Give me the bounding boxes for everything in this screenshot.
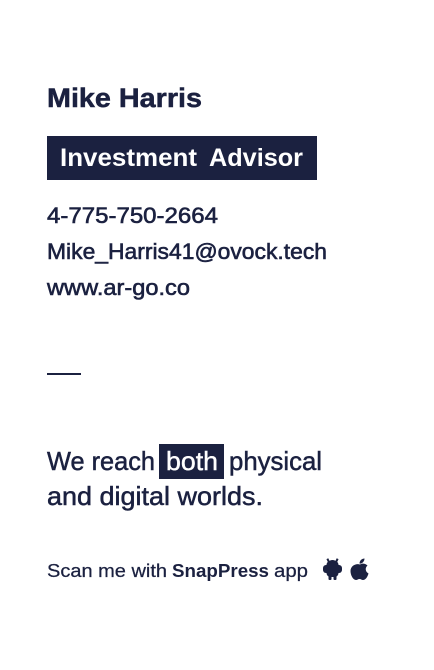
tagline: We reach	[47, 446, 155, 476]
tagline: and digital worlds.	[47, 481, 263, 511]
job title badge: Investment	[60, 144, 198, 172]
phone number: 4-775-750-2664	[47, 203, 218, 228]
scan instruction	[47, 560, 308, 581]
website: www.ar-go.co	[46, 275, 190, 300]
short divider	[47, 373, 81, 375]
job title badge	[47, 136, 317, 180]
highlighted word	[159, 444, 224, 479]
icon: apple	[350, 558, 368, 580]
highlighted word: both	[166, 446, 218, 476]
job title badge: Advisor	[209, 144, 303, 172]
tagline: physical	[229, 446, 322, 476]
scan instruction: SnapPress	[172, 560, 269, 581]
name heading: Mike Harris	[47, 83, 202, 113]
tagline	[47, 444, 322, 511]
scan instruction: Scan me with	[47, 560, 167, 581]
email address: Mike_Harris41@ovock.tech	[47, 239, 327, 264]
icon: android	[323, 558, 342, 580]
contact details	[46, 203, 327, 300]
scan instruction: app	[274, 560, 308, 581]
